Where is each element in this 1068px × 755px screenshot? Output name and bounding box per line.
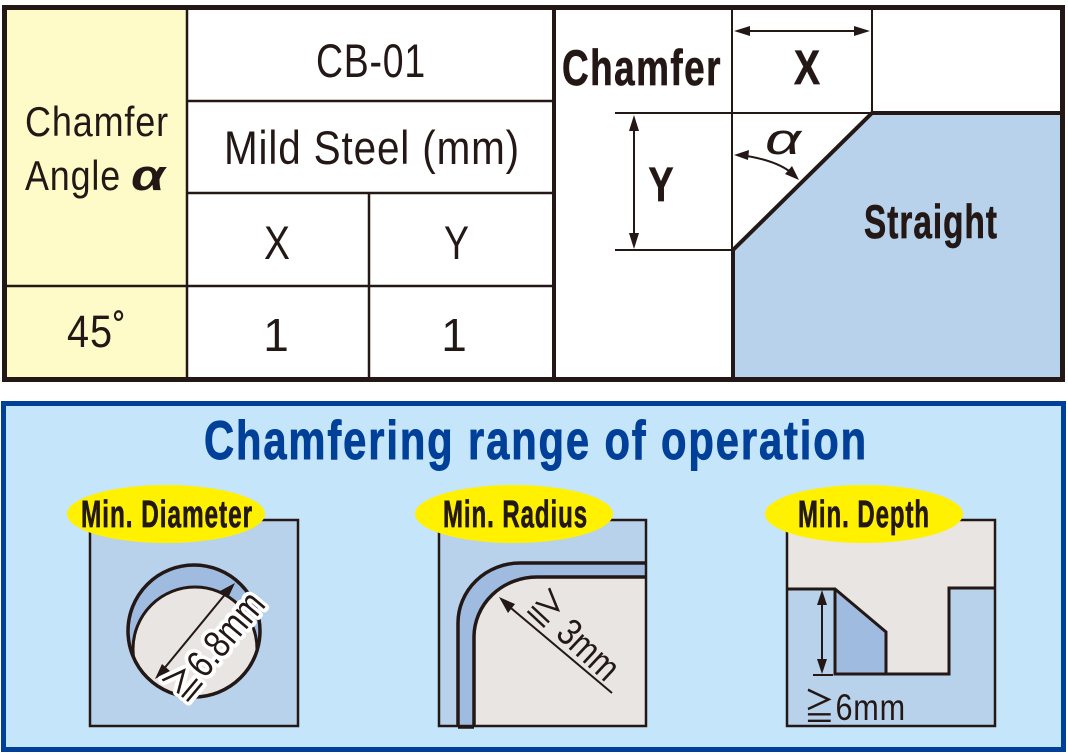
angle alpha arc bbox=[734, 115, 804, 180]
badge: min radius: Min. Radius bbox=[443, 494, 588, 536]
label: 6mm: ≧6mm bbox=[804, 687, 906, 728]
table header cell: chamfer angle bbox=[6, 9, 187, 378]
table text: Y value: 1 bbox=[441, 309, 467, 361]
table text: X value: 1 bbox=[263, 309, 289, 361]
angle alpha arc: α bbox=[765, 115, 804, 164]
table text: 45 degrees: 45˚ bbox=[67, 306, 127, 357]
table header cell: chamfer angle: Angle bbox=[25, 152, 121, 199]
table text: CB-01: CB-01 bbox=[316, 34, 426, 87]
badge: min depth: Min. Depth bbox=[798, 494, 930, 536]
table text: Y column: Y bbox=[444, 216, 469, 269]
heading: Chamfering range of operation bbox=[204, 409, 868, 471]
label: 6.8mm: ≧6.8mm bbox=[158, 583, 274, 710]
dimension Y: Y bbox=[648, 159, 674, 212]
table header cell: chamfer angle: Chamfer bbox=[25, 98, 169, 145]
table text: mild steel: Mild Steel (mm) bbox=[224, 121, 520, 174]
panel: chamfer table and diagram bbox=[4, 7, 1062, 380]
diagram: min diameter bbox=[67, 485, 298, 726]
badge: min depth bbox=[765, 485, 963, 543]
table header cell: chamfer angle: α bbox=[131, 151, 167, 200]
diagram: min radius bbox=[415, 485, 646, 727]
label: 3mm: ≧ 3mm bbox=[519, 584, 628, 690]
badge: min radius bbox=[415, 485, 613, 543]
badge: min diameter: Min. Diameter bbox=[81, 494, 253, 536]
chamfer diagram: straight part bbox=[733, 113, 1062, 378]
panel: chamfering range of operation bbox=[4, 404, 1064, 750]
vertical divider bbox=[552, 8, 556, 378]
table text: X column: X bbox=[264, 216, 290, 269]
dimension X: X bbox=[794, 42, 820, 95]
outer frame bbox=[4, 8, 1062, 380]
dimension Y bbox=[629, 115, 674, 249]
chamfer diagram: guide lines bbox=[615, 8, 872, 250]
chamfer diagram: straight part: Straight bbox=[864, 195, 998, 248]
chamfer label: Chamfer bbox=[562, 40, 722, 96]
diagram: min depth bbox=[765, 485, 995, 728]
dimension X bbox=[734, 26, 870, 95]
table grid lines bbox=[6, 8, 553, 378]
badge: min diameter bbox=[67, 485, 265, 543]
